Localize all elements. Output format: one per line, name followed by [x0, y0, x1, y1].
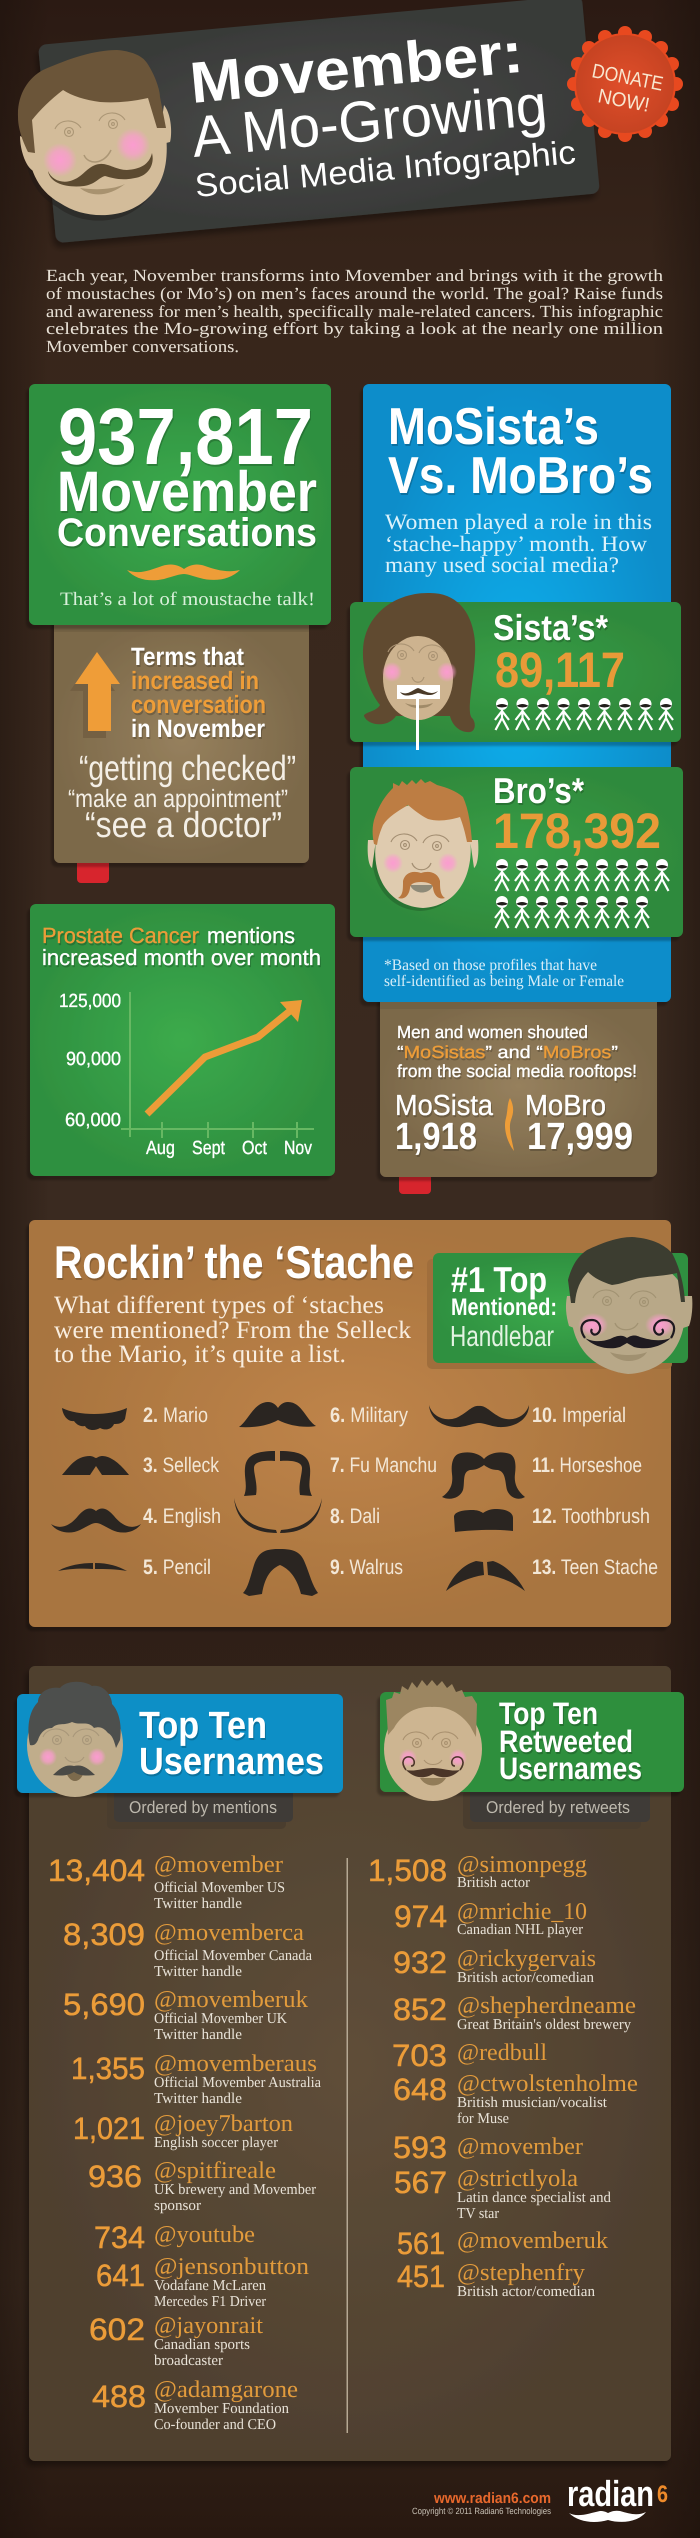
banner: top ten retweeted usernames: Retweeted [499, 1724, 633, 1759]
label: Sista's: Sista’s* [493, 607, 608, 648]
panel: Rockin' the 'Stache [29, 1220, 692, 1627]
stat: MoBro 17,999: 17,999 [527, 1116, 633, 1158]
row: 13,404 @movember: 13,404 [48, 1853, 145, 1888]
heading: MoSista's Vs. MoBro's: Vs. MoBro’s [388, 447, 653, 505]
row: 1,508 @simonpegg: British actor [457, 1875, 530, 1891]
y axis labels: 60,000 [65, 1110, 121, 1131]
row: 488 @adamgarone: Co-founder and CEO [154, 2417, 276, 2433]
text: terms that increased in conversation in november: increased in [131, 667, 259, 695]
row: 13,404 @movember: @movember [154, 1852, 283, 1878]
row: 932 @rickygervais: 932 [393, 1945, 447, 1980]
intro paragraph [46, 266, 664, 356]
row: 451 @stephenfry [397, 2259, 596, 2300]
row: 561 @movemberuk: 561 [397, 2226, 445, 2261]
row: 1,355 @movemberaus: @movemberaus [154, 2051, 317, 2077]
row: 1,508 @simonpegg: @simonpegg [457, 1852, 587, 1878]
text: terms that increased in conversation in november: conversation [131, 691, 266, 719]
icon: orange squiggle [505, 1098, 514, 1151]
text: women played a role [385, 509, 652, 577]
banner: top ten retweeted usernames [380, 1680, 684, 1801]
row: 8,309 @movemberca: Official Movember Canada [154, 1948, 312, 1964]
row: 974 @mrichie_10: 974 [394, 1899, 447, 1934]
text: shouted: from the social media rooftops! [397, 1061, 637, 1081]
text: shouted: Men and women shouted [397, 1022, 588, 1042]
list: top ten retweeted usernames [368, 1852, 638, 2300]
row: 852 @shepherdneame [393, 1992, 636, 2033]
donate badge [567, 26, 683, 142]
row: 8,309 @movemberca: 8,309 [63, 1917, 145, 1952]
number: 178,392: 178,392 [493, 803, 661, 859]
panel: 937,817 conversations [29, 384, 331, 625]
tagline: That’s a lot of moustache talk! [60, 589, 315, 610]
row: 936 @spitfireale [88, 2158, 316, 2214]
row: 451 @stephenfry: British actor/comedian [457, 2284, 596, 2300]
row: 936 @spitfireale: 936 [88, 2159, 142, 2194]
row: 734 @youtube [94, 2220, 255, 2255]
intro paragraph: Each year, November transforms into Movember and brings with it the growth [46, 266, 664, 285]
text: donate now: NOW! [596, 85, 651, 117]
item: 10. Imperial: 10. Imperial [532, 1404, 626, 1427]
panel: shouted mosistas and mobros [364, 990, 670, 1194]
tab: ordered by mentions: Ordered by mentions [129, 1798, 277, 1817]
row: 852 @shepherdneame: 852 [393, 1992, 447, 2027]
row: 561 @movemberuk: @movemberuk [457, 2228, 608, 2254]
row: 593 @movember [393, 2130, 583, 2165]
heading: Movember: Movember [57, 460, 317, 524]
number: 89,117: 89,117 [495, 642, 625, 698]
row: 451 @stephenfry: @stephenfry [457, 2260, 585, 2286]
chart heading: Prostate Cancer [42, 923, 199, 948]
panel: terms that increased [54, 615, 309, 883]
text: quoted terms [68, 749, 296, 845]
tab: ordered by retweets: Ordered by retweets [486, 1798, 630, 1817]
text: shouted: “MoSistas ” and “ MoBros ” [397, 1042, 618, 1062]
panel: top ten lists [17, 1666, 684, 2461]
callout: #1 top mentioned: Mentioned: [451, 1294, 557, 1321]
row: 451 @stephenfry: 451 [397, 2259, 445, 2294]
item: 6. Military: 6. Military [330, 1404, 408, 1427]
logo: radian6: 6 [657, 2481, 668, 2508]
title: Movember: Movember: [187, 20, 526, 116]
row: 602 @jayonrait: broadcaster [154, 2353, 223, 2369]
item: 8. Dali [234, 1498, 380, 1533]
x axis labels: Aug [146, 1138, 175, 1159]
item: 13. Teen Stache [446, 1556, 658, 1591]
item: 3. Selleck [62, 1454, 219, 1477]
icon: man face with ginger hair [368, 779, 478, 911]
stat: MoSista 1,918: MoSista [395, 1090, 494, 1122]
text: women played a role: ‘stache-happy’ month. How [385, 531, 647, 556]
banner: top ten usernames [17, 1682, 343, 1797]
row: 488 @adamgarone [92, 2377, 298, 2433]
item: 11. Horseshoe: 11. Horseshoe [532, 1454, 642, 1477]
number: 937,817: 937,817 [58, 392, 313, 481]
row: 567 @strictlyola: TV star [457, 2206, 499, 2222]
item: 12. Toothbrush: 12. Toothbrush [532, 1505, 650, 1528]
panel: Sista's [350, 593, 681, 750]
panel: prostate cancer chart [30, 904, 335, 1176]
stat: MoBro 17,999 [525, 1090, 633, 1158]
footnote [384, 957, 624, 990]
row: 567 @strictlyola: Latin dance specialist and [457, 2190, 611, 2206]
row: 1,355 @movemberaus: Twitter handle [154, 2091, 242, 2107]
chart heading [42, 923, 321, 970]
row: 488 @adamgarone: 488 [92, 2379, 146, 2414]
logo: radian6: radian [567, 2473, 654, 2514]
row: 641 @jensonbutton [96, 2254, 309, 2310]
callout: #1 top mentioned: #1 Top [451, 1259, 547, 1300]
row: 932 @rickygervais: British actor/comedian [457, 1970, 594, 1986]
title: Social Media Infographic: Social Media Infographic [193, 133, 577, 204]
row: 602 @jayonrait: @jayonrait [154, 2313, 263, 2339]
text: terms that increased in conversation in november [131, 643, 266, 743]
intro text [54, 1292, 412, 1368]
row: 641 @jensonbutton: 641 [96, 2258, 145, 2293]
row: 1,021 @joey7barton: @joey7barton [154, 2111, 293, 2137]
item: 8. Dali: 8. Dali [330, 1505, 380, 1528]
row: 703 @redbull [392, 2038, 547, 2073]
item: 7. Fu Manchu: 7. Fu Manchu [330, 1454, 437, 1477]
row: 648 @ctwolstenholme: 648 [393, 2072, 447, 2107]
text: terms that increased in conversation in november: Terms that [131, 643, 245, 671]
icon rows: people [495, 859, 669, 928]
intro text: What different types of ‘staches [54, 1292, 384, 1319]
row: 5,690 @movemberuk [63, 1987, 308, 2043]
row: 1,021 @joey7barton: English soccer player [154, 2135, 278, 2151]
row: 13,404 @movember [48, 1852, 285, 1912]
row: 5,690 @movemberuk: Twitter handle [154, 2027, 242, 2043]
footnote: self-identified as being Male or Female [384, 973, 624, 990]
row: 1,021 @joey7barton: 1,021 [73, 2111, 145, 2146]
row: 648 @ctwolstenholme: British musician/vocalist [457, 2095, 608, 2111]
row: 1,021 @joey7barton [73, 2111, 293, 2151]
footer: credits: www.radian6.com [433, 2490, 551, 2507]
icon: spiky-haired face [384, 1680, 482, 1801]
row: 567 @strictlyola: @strictlyola [457, 2166, 578, 2192]
row: 5,690 @movemberuk: Official Movember UK [154, 2011, 287, 2027]
list divider [346, 1858, 348, 2433]
text: women played a role: many used social media? [385, 552, 619, 577]
tab: ordered by mentions [107, 1785, 293, 1829]
heading: Conversations: Conversations [57, 511, 317, 555]
item: 9. Walrus [243, 1549, 403, 1596]
row: 974 @mrichie_10 [394, 1899, 587, 1938]
callout: #1 top mentioned [427, 1237, 692, 1374]
icon: header moustached face [18, 50, 171, 221]
item: 11. Horseshoe [442, 1452, 642, 1499]
row: 1,355 @movemberaus [71, 2051, 321, 2107]
row: 5,690 @movemberuk: @movemberuk [154, 1987, 308, 2013]
intro text: were mentioned? From the Selleck [54, 1317, 412, 1344]
x axis labels: Sept [192, 1138, 226, 1159]
text: donate now [590, 60, 665, 117]
item: 2. Mario: 2. Mario [143, 1404, 208, 1427]
row: 852 @shepherdneame: @shepherdneame [457, 1993, 636, 2019]
row: 641 @jensonbutton: Mercedes F1 Driver [154, 2294, 266, 2310]
x axis labels: Oct [242, 1138, 268, 1159]
row: 1,508 @simonpegg [368, 1852, 587, 1891]
row: 5,690 @movemberuk: 5,690 [63, 1987, 145, 2022]
y axis labels: 125,000 [59, 991, 121, 1012]
text: quoted terms: “make an appointment” [68, 785, 288, 813]
callout: #1 top mentioned: Handlebar [450, 1321, 554, 1353]
row: 1,355 @movemberaus: 1,355 [71, 2051, 145, 2086]
row: 641 @jensonbutton: @jensonbutton [154, 2254, 309, 2280]
heading: MoSista's Vs. MoBro's [388, 398, 653, 505]
item: 4. English: 4. English [143, 1505, 221, 1528]
intro paragraph: and awareness for men’s health, specifically male-related cancers. This infographic [46, 302, 663, 321]
row: 13,404 @movember: Twitter handle [154, 1896, 242, 1912]
item: 2. Mario [62, 1404, 208, 1430]
heading: MoSista's Vs. MoBro's: MoSista’s [388, 398, 599, 456]
row: 8,309 @movemberca: @movemberca [154, 1920, 304, 1946]
footer: credits [412, 2490, 551, 2516]
intro paragraph: of moustaches (or Mo’s) on men’s faces around the world. The goal? Raise funds [46, 284, 663, 303]
chart heading: increased month over month [42, 945, 321, 970]
footnote: *Based on those profiles that have [384, 957, 597, 974]
icon row: people [495, 698, 673, 730]
item: 9. Walrus: 9. Walrus [330, 1556, 403, 1579]
row: 936 @spitfireale: @spitfireale [154, 2158, 276, 2184]
item: 5. Pencil [58, 1556, 211, 1579]
row: 648 @ctwolstenholme: @ctwolstenholme [457, 2071, 638, 2097]
row: 488 @adamgarone: Movember Foundation [154, 2401, 289, 2417]
header: title plate [38, 0, 600, 243]
row: 567 @strictlyola: 567 [394, 2165, 447, 2200]
x axis labels: Nov [284, 1138, 312, 1159]
row: 703 @redbull: 703 [392, 2038, 447, 2073]
label: Bro's: Bro’s* [493, 770, 584, 811]
banner: top ten retweeted usernames: Top Ten [499, 1696, 598, 1731]
moustache list [51, 1402, 658, 1596]
row: 602 @jayonrait: Canadian sports [154, 2337, 250, 2353]
banner: top ten usernames: Top Ten [139, 1705, 267, 1747]
title: A Mo-Growing: A Mo-Growing [189, 72, 550, 170]
panel: MoSista's vs MoBro's [363, 384, 671, 1002]
row: 641 @jensonbutton: Vodafane McLaren [154, 2278, 266, 2294]
text: quoted terms: “getting checked” [79, 749, 296, 788]
icon: up arrow [70, 652, 120, 738]
intro paragraph: Movember conversations. [46, 337, 239, 356]
row: 974 @mrichie_10: Canadian NHL player [457, 1922, 583, 1938]
row: 936 @spitfireale: sponsor [154, 2198, 201, 2214]
row: 561 @movemberuk [397, 2226, 608, 2261]
row: 1,508 @simonpegg: 1,508 [368, 1853, 447, 1888]
item: 3. Selleck: 3. Selleck [143, 1454, 219, 1477]
text: shouted [397, 1022, 637, 1081]
row: 734 @youtube: 734 [94, 2220, 145, 2255]
y axis labels [59, 991, 121, 1131]
footer: credits: Copyright © 2011 Radian6 Technologies [412, 2506, 551, 2516]
x axis labels [146, 1138, 312, 1159]
line chart [59, 991, 314, 1159]
heading: Rockin’ the ‘Stache [54, 1236, 414, 1288]
icon: curly-haired face [27, 1682, 123, 1797]
row: 567 @strictlyola [394, 2165, 611, 2222]
text: terms that increased in conversation in november: in November [131, 715, 265, 743]
icon: orange moustache [127, 565, 240, 580]
row: 8,309 @movemberca [63, 1917, 312, 1980]
stat: MoSista 1,918: 1,918 [395, 1116, 477, 1158]
item: 6. Military [239, 1402, 408, 1427]
row: 703 @redbull: @redbull [457, 2040, 547, 2066]
panel: Bro's [350, 767, 683, 937]
row: 602 @jayonrait: 602 [89, 2312, 145, 2347]
y axis labels: 90,000 [66, 1049, 121, 1070]
banner: top ten usernames: Usernames [139, 1741, 324, 1783]
row: 488 @adamgarone: @adamgarone [154, 2377, 298, 2403]
row: 1,355 @movemberaus: Official Movember Australia [154, 2075, 321, 2091]
row: 8,309 @movemberca: Twitter handle [154, 1964, 242, 1980]
row: 932 @rickygervais [393, 1945, 596, 1986]
row: 13,404 @movember: Official Movember US [154, 1880, 285, 1896]
text: quoted terms: “see a doctor” [85, 804, 282, 845]
tab: ordered by retweets [463, 1785, 650, 1829]
stat: MoSista 1,918 [395, 1090, 494, 1158]
row: 936 @spitfireale: UK brewery and Movember [154, 2182, 316, 2198]
item: 4. English [51, 1505, 221, 1532]
row: 602 @jayonrait [89, 2312, 263, 2369]
item: 13. Teen Stache: 13. Teen Stache [532, 1556, 658, 1579]
stat: MoBro 17,999: MoBro [525, 1090, 606, 1122]
intro paragraph: celebrates the Mo-growing effort by taking a look at the nearly one million [46, 319, 664, 338]
text: donate now: DONATE [590, 60, 665, 96]
arrow: trend line [147, 1000, 302, 1114]
row: 648 @ctwolstenholme [393, 2071, 638, 2127]
banner: top ten retweeted usernames: Usernames [499, 1751, 642, 1786]
icon: woman face with stick moustache [363, 593, 475, 750]
item: 7. Fu Manchu [244, 1451, 437, 1496]
item: 12. Toothbrush [454, 1505, 650, 1532]
item: 10. Imperial [429, 1404, 626, 1427]
list: top ten usernames [48, 1852, 321, 2433]
row: 974 @mrichie_10: @mrichie_10 [457, 1899, 587, 1925]
row: 593 @movember: @movember [457, 2134, 583, 2160]
row: 593 @movember: 593 [393, 2130, 447, 2165]
row: 648 @ctwolstenholme: for Muse [457, 2111, 509, 2127]
text: women played a role: Women played a role in this [385, 509, 652, 534]
item: 5. Pencil: 5. Pencil [143, 1556, 211, 1579]
chart heading: mentions [207, 923, 295, 948]
icon: handlebar face [566, 1237, 692, 1374]
row: 852 @shepherdneame: Great Britain's oldest brewery [457, 2017, 631, 2033]
row: 932 @rickygervais: @rickygervais [457, 1946, 596, 1972]
row: 734 @youtube: @youtube [154, 2222, 255, 2248]
intro text: to the Mario, it’s quite a list. [54, 1341, 346, 1368]
